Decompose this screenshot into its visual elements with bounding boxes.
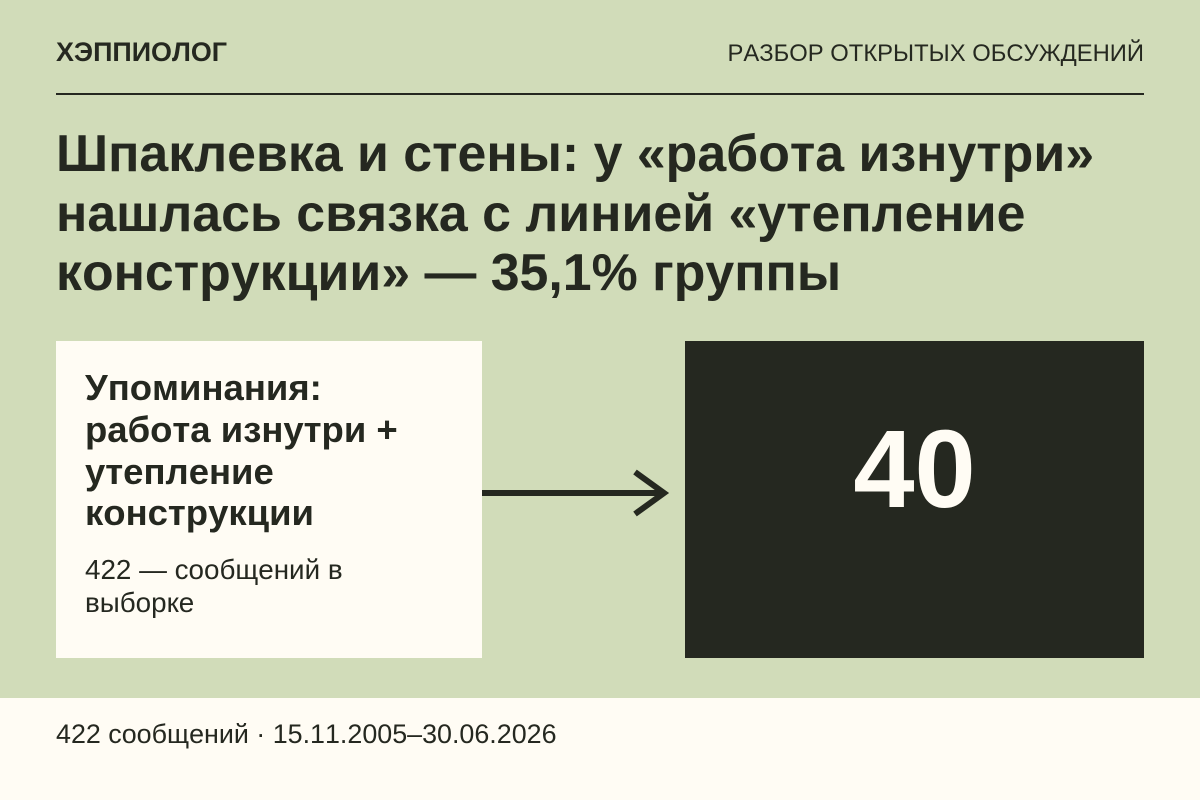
panel note: 422 — сообщений в bbox=[85, 554, 343, 585]
footer bbox=[0, 698, 1200, 800]
title bbox=[56, 124, 1094, 301]
panel heading: работа изнутри + bbox=[85, 409, 398, 450]
panel: value bbox=[685, 341, 1144, 658]
panel note bbox=[85, 554, 343, 618]
panel heading: конструкции bbox=[85, 492, 314, 533]
panel: mentions bbox=[56, 341, 482, 658]
title: нашлась связка с линией «утепление bbox=[56, 184, 1025, 242]
panel heading: Упоминания: bbox=[85, 367, 322, 408]
brand heading: ХЭППИОЛОГ bbox=[56, 37, 227, 67]
arrow bbox=[482, 470, 669, 516]
title: конструкции» — 35,1% группы bbox=[56, 243, 841, 301]
footer text: 422 сообщений · 15.11.2005–30.06.2026 bbox=[56, 719, 557, 749]
panel heading bbox=[85, 367, 398, 533]
panel heading: утепление bbox=[85, 451, 274, 492]
panel note: выборке bbox=[85, 587, 194, 618]
header caption: РАЗБОР ОТКРЫТЫХ ОБСУЖДЕНИЙ bbox=[728, 40, 1144, 67]
big number: 40 bbox=[853, 408, 976, 530]
title: Шпаклевка и стены: у «работа изнутри» bbox=[56, 124, 1094, 182]
